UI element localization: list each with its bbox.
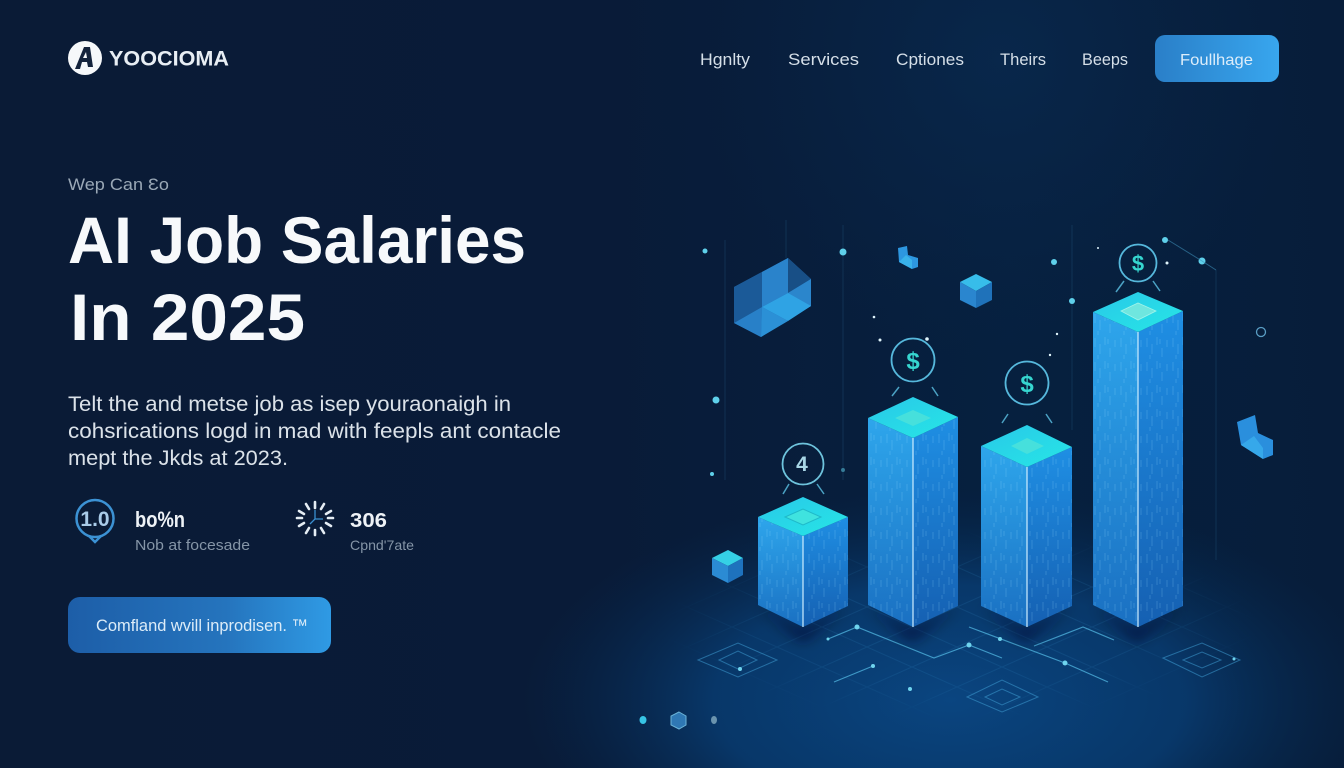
- description: cohsrications logd in mad with feepls ant contacle: [68, 420, 561, 443]
- icon: radial clock: [297, 502, 333, 535]
- stat value: 306: [350, 510, 387, 532]
- bar shadows: [758, 606, 1184, 640]
- bar 4: [1093, 292, 1183, 627]
- pagination dots: [640, 712, 717, 729]
- icon: value badge on bar 1: [782, 444, 824, 494]
- bar 3: [981, 425, 1072, 627]
- description: [68, 393, 561, 470]
- navigation: [700, 50, 1128, 69]
- description: Telt the and metse job as isep youraonaigh in: [68, 393, 511, 416]
- nav item 2: Services: [788, 50, 859, 69]
- stat one: [76, 500, 250, 554]
- header button: Foullhage: [1180, 52, 1253, 69]
- icon: floating cube lower left: [712, 550, 743, 583]
- icon: value badge on bar 1: 4: [796, 453, 808, 476]
- icon: logo badge: [68, 41, 102, 75]
- icon: dollar badge on bar 4: [1116, 244, 1160, 292]
- stat caption: Cpnd'7ate: [350, 537, 414, 553]
- nav item 3: Cptiones: [896, 50, 964, 69]
- stat value: bo%n: [135, 507, 185, 532]
- description: mept the Jkds at 2023.: [68, 447, 288, 470]
- title: In 2025: [70, 280, 305, 354]
- brand name: YOOCIOMA: [109, 48, 229, 70]
- icon: dollar badge on bar 4: $: [1132, 251, 1144, 276]
- bar 1: [758, 497, 848, 627]
- call to action button: Comfland wvill inprodisen. ™: [96, 616, 308, 635]
- header logo: [68, 41, 229, 75]
- icon: dollar badge on bar 3: [1002, 362, 1052, 423]
- icon: dollar badge on bar 3: $: [1020, 371, 1034, 398]
- stat caption: Nob at focesade: [135, 537, 250, 554]
- call to action button: [68, 597, 331, 653]
- icon: floating L block: [1237, 415, 1273, 459]
- icon: small floating block: [898, 246, 918, 269]
- isometric floor grid: [697, 556, 1241, 712]
- bar chart: [758, 292, 1184, 640]
- title: AI Job Salaries: [68, 203, 526, 277]
- eyebrow: Wep Can Ɛo: [68, 175, 169, 194]
- header button: [1155, 35, 1279, 82]
- icon: dollar badge on bar 2: $: [906, 348, 920, 375]
- icon: floating cube top: [960, 274, 992, 308]
- icon: large floating hexagon block: [734, 258, 811, 337]
- icon: number pin: 1.0: [80, 508, 110, 531]
- nav item 5: Beeps: [1082, 50, 1128, 69]
- icon: number pin: [76, 500, 114, 542]
- title: [68, 203, 526, 354]
- nav item 1: Hgnlty: [700, 50, 751, 69]
- stat two: [297, 502, 414, 553]
- nav item 4: Theirs: [1000, 50, 1046, 69]
- floating particles: [702, 237, 1266, 476]
- icon: dollar badge on bar 2: [892, 338, 938, 396]
- bar 2: [868, 397, 958, 627]
